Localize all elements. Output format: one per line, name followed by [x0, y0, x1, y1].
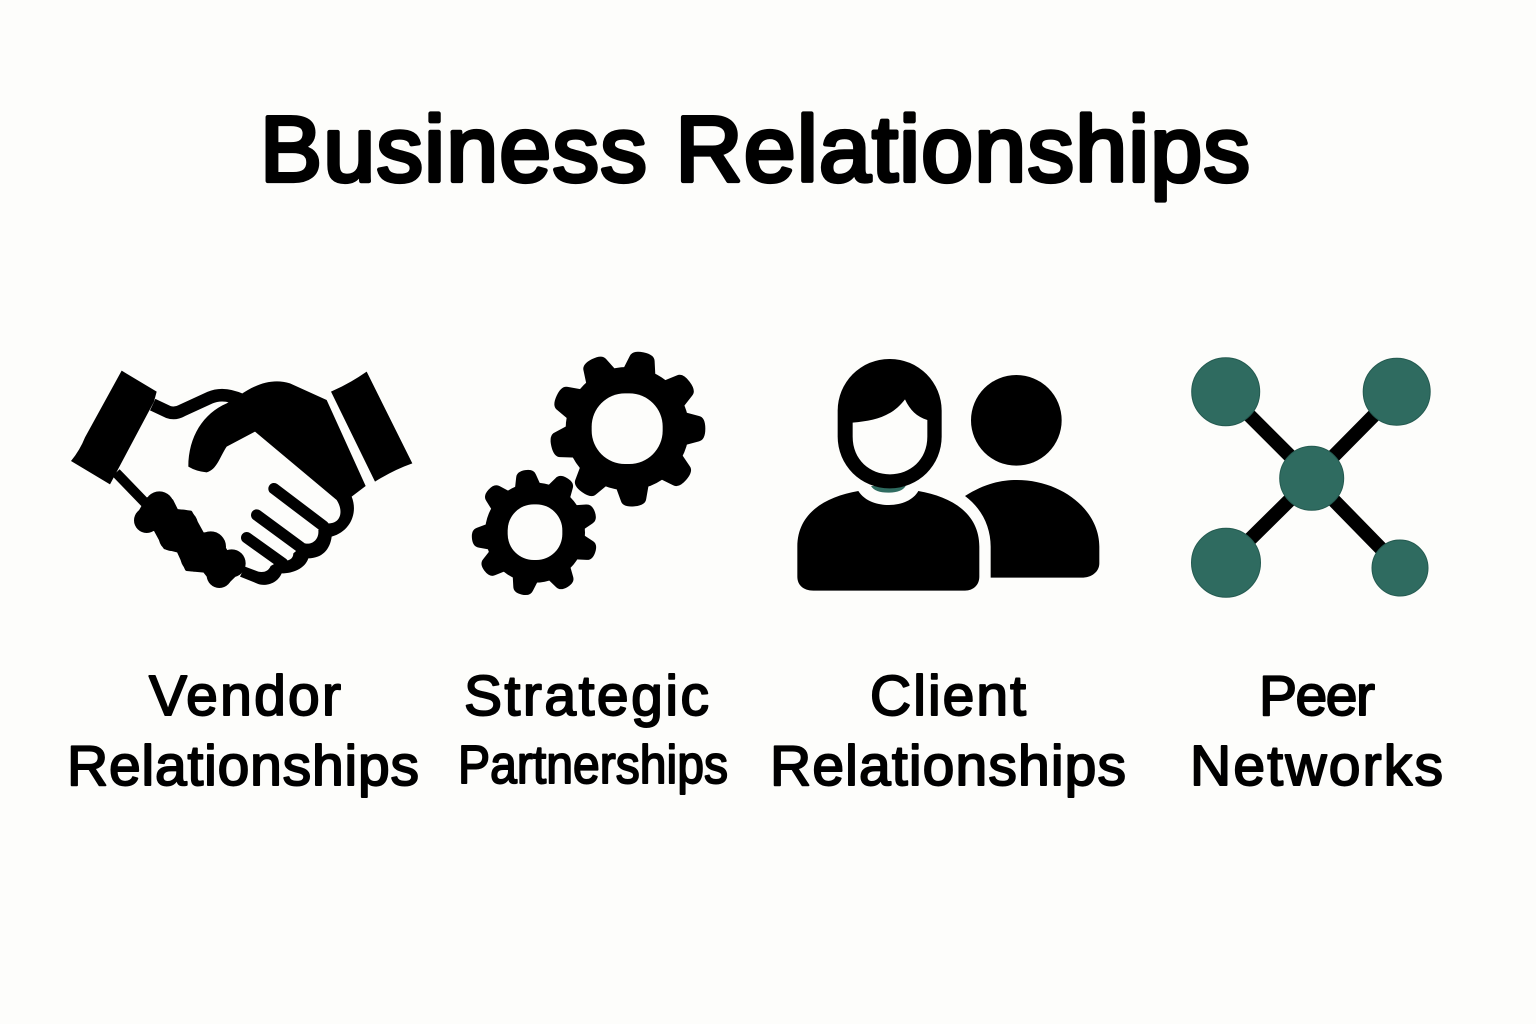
label: Strategic Partnerships: Strategic	[464, 664, 709, 728]
label: Client Relationships: Client	[870, 664, 1026, 728]
front person hair	[838, 359, 942, 488]
finger gaps	[247, 489, 323, 563]
right cuff	[331, 372, 412, 482]
label: Strategic Partnerships: Partnerships	[458, 735, 728, 795]
label: Client Relationships: Relationships	[770, 734, 1126, 798]
small gear	[471, 468, 599, 597]
label: Peer Networks: Networks	[1190, 734, 1443, 798]
icon: network	[1192, 358, 1430, 597]
knuckles	[134, 491, 246, 588]
back person body	[965, 480, 1099, 578]
back person head	[971, 375, 1062, 466]
icon: gears	[471, 349, 705, 597]
label: Peer Networks: Peer	[1259, 664, 1375, 728]
title: Business Relationships	[260, 97, 1250, 201]
right hand	[188, 381, 366, 585]
icon: client people	[797, 359, 1099, 591]
label: Client Relationships	[770, 664, 1126, 798]
label: Strategic Partnerships	[458, 664, 728, 795]
label: Vendor Relationships	[67, 664, 419, 798]
label: Peer Networks	[1190, 664, 1443, 798]
left hand outline	[153, 395, 242, 413]
large gear	[548, 349, 705, 508]
front person face	[853, 399, 927, 474]
label: Vendor Relationships: Vendor	[149, 664, 341, 728]
label: Vendor Relationships: Relationships	[67, 734, 419, 798]
icon: handshake	[71, 371, 412, 588]
left cuff	[71, 371, 157, 484]
front person neck	[871, 486, 906, 493]
front person body	[797, 491, 979, 591]
